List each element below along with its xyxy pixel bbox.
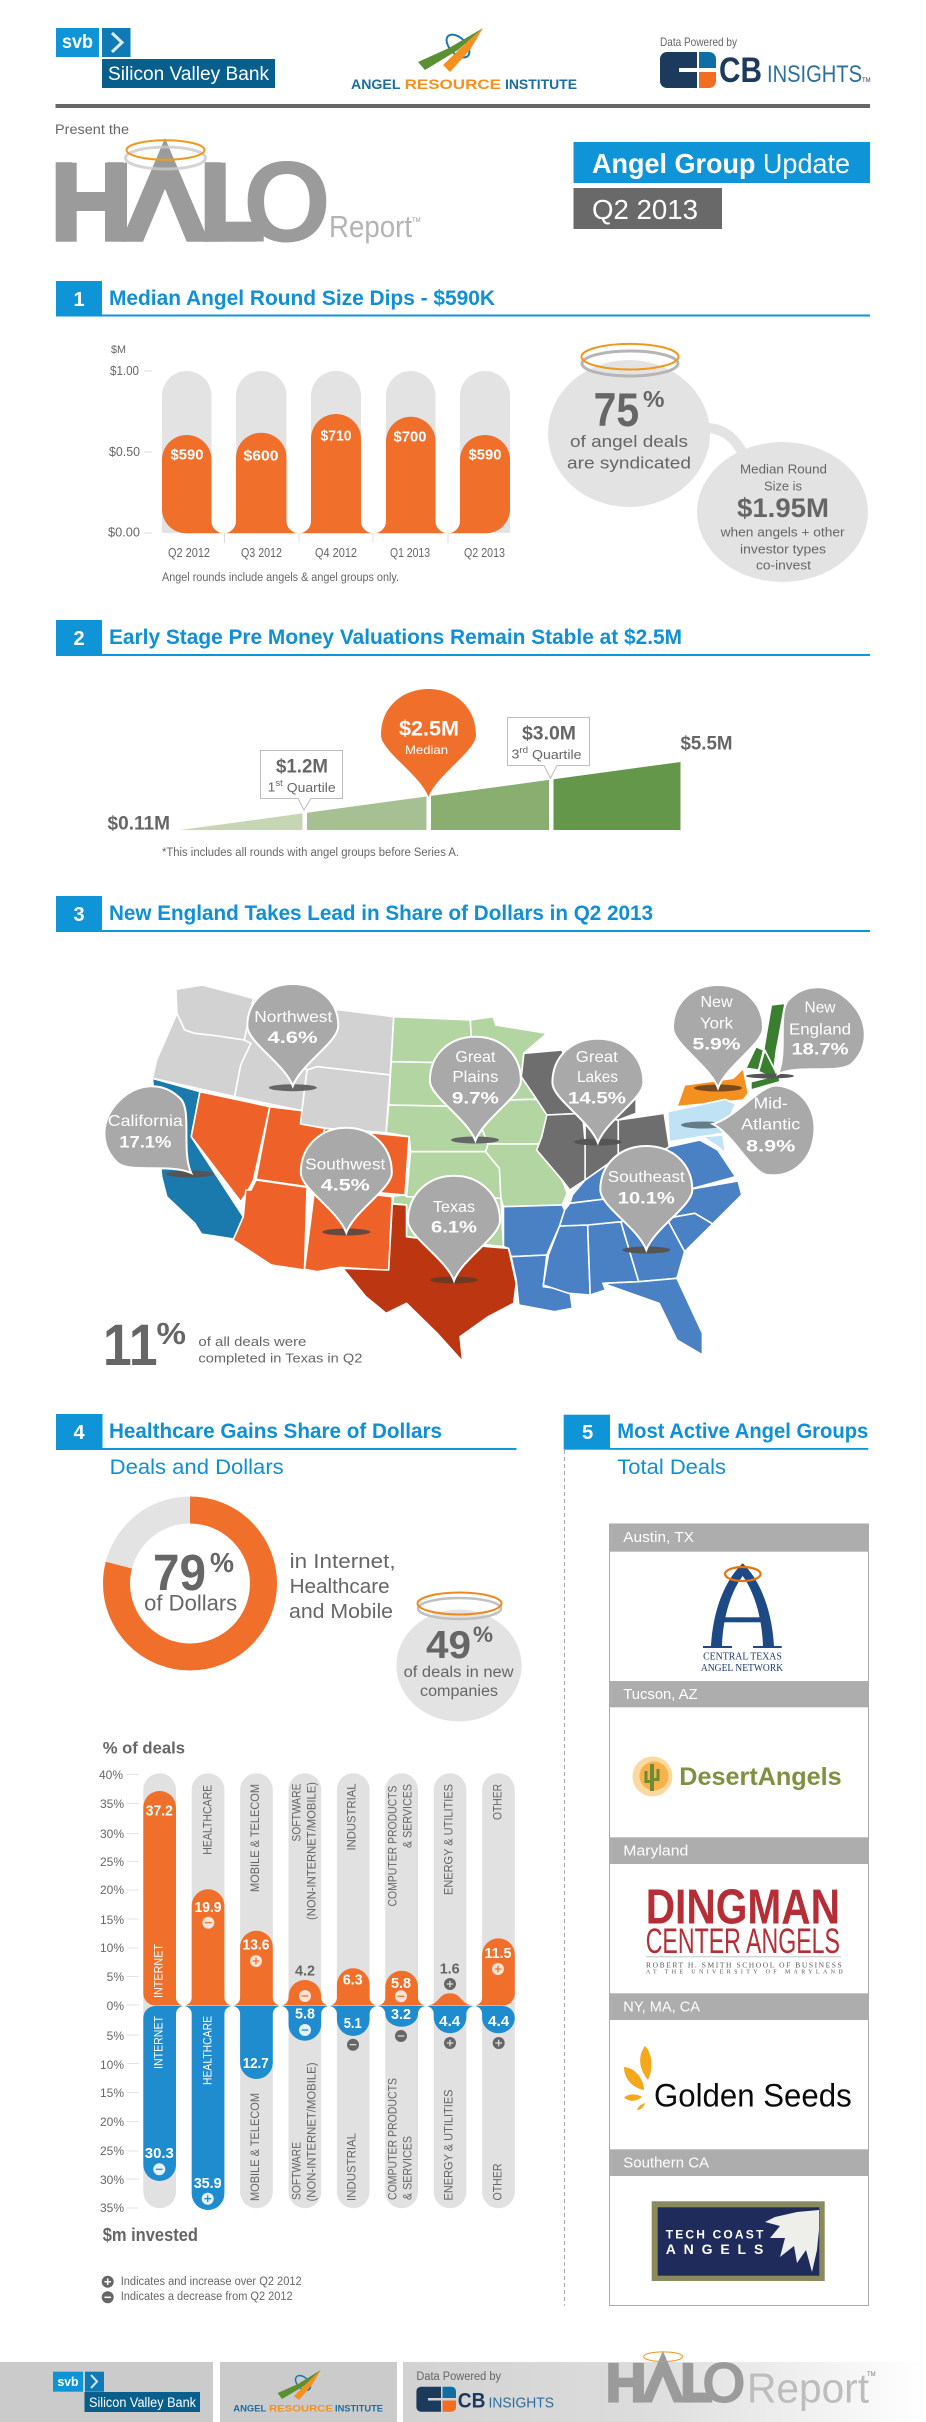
values: percent of deals: 37.2: [146, 1802, 173, 1820]
logo: Tech Coast Angels: [652, 2201, 825, 2281]
stat: 11% of deals in Texas: completed in Texas in Q2: [198, 1350, 362, 1366]
pin: Great Plains: Great: [455, 1049, 496, 1066]
heading: section 5: [564, 1415, 868, 1450]
bar: Q2 2013: $590: [468, 446, 502, 464]
pin: Great Lakes: [552, 1039, 643, 1146]
pin: New England: [746, 970, 882, 1106]
heading: section 4: Healthcare Gains Share of Dollars: [109, 1420, 442, 1443]
callout: 3rd quartile: Quartile: [528, 746, 582, 762]
values: dollars invested: 3.2: [391, 2006, 411, 2023]
y axis: 25%: [100, 1855, 124, 1869]
subheading: deals and dollars: Deals and Dollars: [110, 1456, 284, 1479]
logo: Angel Resource Institute: ANGEL: [351, 76, 401, 92]
sector labels: bottom row: (NON-INTERNET/MOBILE): [307, 2062, 319, 2202]
logo: Tech Coast Angels: ANGELS: [666, 2241, 763, 2257]
legend: decrease: Indicates a decrease from Q2 2012: [121, 2291, 293, 2303]
logo: HALO Report small: O: [702, 2351, 746, 2415]
row header: Maryland: [609, 1837, 869, 1864]
sector labels: bottom row: OTHER: [492, 2164, 504, 2200]
callout: 75% syndicated: are syndicated: [567, 454, 691, 472]
pin: Southwest: 4.5%: [321, 1176, 370, 1194]
callout: 75% syndicated: 75: [594, 383, 639, 436]
callout: median pin: [381, 689, 476, 797]
y axis: 15%: [100, 1913, 124, 1927]
logo: Silicon Valley Bank: svb: [62, 32, 93, 53]
region: New England states: [746, 1003, 785, 1090]
y axis: 10%: [100, 2058, 124, 2072]
logo: HALO Report small: A: [659, 2364, 668, 2378]
y axis: 5%: [107, 2029, 124, 2043]
stat: 11% of deals in Texas: %: [156, 1316, 186, 1351]
bar: Q2 2013: [448, 435, 510, 533]
sector labels: bottom row: & SERVICES: [402, 2136, 414, 2200]
heading: section 4: [56, 1414, 516, 1450]
values: dollars invested: 30.3: [145, 2145, 174, 2162]
logo: HALO Report small: L: [679, 2352, 714, 2416]
region: California: [152, 1078, 243, 1239]
logo: HALO Report: H: [48, 139, 131, 267]
row header: Tucson, AZ: Tucson, AZ: [623, 1686, 698, 1703]
bar: Q3 2012: [224, 433, 299, 533]
title banner: Q2 2013: [574, 188, 722, 229]
sector labels: bottom row: MOBILE & TELECOM: [250, 2093, 262, 2201]
callout: 3rd quartile: $3.0M: [522, 724, 576, 744]
bar: Q3 2012: $600: [244, 448, 278, 464]
values: percent of deals: [146, 1802, 512, 1992]
logo: HALO Report: TM: [412, 218, 421, 224]
logo: HALO Report: Report: [329, 209, 412, 244]
values: percent of deals: 4.2: [295, 1962, 315, 1980]
logo: Golden Seeds: [624, 2046, 852, 2114]
y axis: 20%: [100, 1883, 124, 1897]
bars: dollars invested (blue): [143, 2006, 515, 2210]
callout: 1st quartile: Quartile: [283, 780, 336, 794]
bar: Q4 2012: [299, 414, 373, 533]
heading: section 1: Median Angel Round Size Dips - $590K: [109, 287, 495, 310]
sector labels: bottom row: SOFTWARE: [292, 2142, 304, 2200]
sector labels: bottom row: INTERNET: [153, 2016, 165, 2069]
row header: Southern CA: [609, 2149, 869, 2176]
header logos: [56, 28, 871, 92]
values: percent of deals: 6.3: [343, 1972, 363, 1988]
y axis: 10%: [100, 1941, 124, 1955]
sector labels: bottom row: COMPUTER PRODUCTS: [387, 2078, 399, 2200]
sector labels: top row: SOFTWARE: [292, 1783, 304, 1842]
pin: Southeast: Southeast: [608, 1169, 685, 1186]
logo: Central Texas Angel Network: [701, 1563, 784, 1674]
bar: Q2 2012: [162, 435, 224, 533]
pin: Mid-Atlantic: 8.9%: [746, 1136, 795, 1156]
row header: Tucson, AZ: [609, 1681, 869, 1707]
title banner: Angel Group Update: Angel Group Update: [592, 148, 850, 179]
donut chart: 79% of dollars: %: [210, 1547, 234, 1578]
callout: 3rd quartile: 3: [512, 746, 519, 762]
pin: Great Lakes: Lakes: [577, 1069, 618, 1086]
values: dollars invested: 35.9: [194, 2175, 222, 2192]
callout: 1st quartile: [260, 750, 342, 810]
footnote: Angel rounds include angels & angel groups only.: [162, 572, 399, 584]
logo: Dingman Center Angels: DINGMAN: [646, 1880, 840, 1934]
y axis: 0%: [107, 1999, 124, 2013]
bar tracks: [143, 1773, 515, 2208]
y axis: 15%: [100, 2086, 124, 2100]
pin: Northwest: Northwest: [254, 1009, 333, 1026]
logo: Dingman Center Angels: AT THE UNIVERSITY OF MARYLAND: [646, 1970, 843, 1976]
legend: [102, 2276, 302, 2303]
map states: [152, 985, 785, 1362]
y axis labels: $1.00: [110, 364, 139, 378]
pin: Southwest: [301, 1128, 392, 1236]
pin: Northwest: [247, 984, 338, 1091]
row header: Southern CA: Southern CA: [623, 2154, 709, 2172]
logo: Angel Resource Institute: INSTITUTE: [505, 76, 577, 92]
callout: 1st quartile: st: [275, 778, 283, 788]
bar tracks: [162, 371, 510, 533]
logo: CB Insights: TM: [862, 78, 871, 84]
values: percent of deals: 19.9: [194, 1899, 222, 1916]
region: southwest states: [191, 1092, 409, 1272]
x axis labels: [168, 546, 505, 560]
logo: Dingman Center Angels: [646, 1880, 843, 1976]
sector labels: top row: INDUSTRIAL: [347, 1783, 359, 1850]
sector labels: top row: [153, 1782, 504, 1998]
pin: Great Plains: Plains: [452, 1069, 498, 1086]
pin: California: 17.1%: [119, 1132, 171, 1152]
change markers: dark: [347, 1978, 505, 2051]
sector labels: top row: MOBILE & TELECOM: [250, 1784, 262, 1892]
callout: 3rd quartile: rd: [519, 745, 528, 755]
region: great plains states: [386, 1017, 567, 1247]
pin: New York: York: [700, 1016, 734, 1032]
region: southeast states: [503, 1140, 742, 1355]
bar: Q2 2012: $590: [170, 446, 204, 464]
footer panel: Angel Resource Institute: RESOURCE: [269, 2404, 333, 2414]
pin: Mid-Atlantic: Atlantic: [741, 1116, 800, 1134]
wedge segments: [180, 762, 680, 830]
pin: Great Plains: [430, 1037, 521, 1144]
logo: CB Insights: Data Powered by: [660, 35, 737, 49]
logo: Desert Angels: [632, 1756, 842, 1796]
y axis: 35%: [100, 2201, 124, 2215]
logo: HALO Report: [48, 138, 421, 267]
pin: Southwest: Southwest: [305, 1156, 386, 1174]
dashed divider: [564, 1450, 566, 2306]
bar: Q4 2012: $710: [320, 428, 352, 444]
row header: NY, MA, CA: [609, 1993, 869, 2020]
sector labels: top row: (NON-INTERNET/MOBILE): [307, 1782, 319, 1920]
logo: Golden Seeds: Golden Seeds: [654, 2078, 852, 2114]
footer panel: CB Insights and Halo Report: Report: [747, 2365, 869, 2412]
y axis: 40%: [99, 1768, 123, 1782]
heading: section 1: 1: [73, 289, 85, 311]
pin: New England: New: [804, 1000, 836, 1016]
callout: 1st quartile: 1: [268, 780, 275, 794]
x axis labels: Q2 2013: [464, 546, 505, 560]
callout: 75% syndicated: %: [643, 386, 664, 412]
map: share of dollars by US region: [87, 970, 882, 1378]
y axis: 35%: [100, 1797, 124, 1811]
pin: California: [87, 1069, 223, 1205]
footer panel: Silicon Valley Bank: Silicon Valley Bank: [89, 2395, 196, 2410]
callout: 75% syndicated: of angel deals: [570, 432, 688, 451]
logo: Desert Angels: DesertAngels: [679, 1763, 842, 1791]
region: northwest states: [152, 985, 394, 1133]
heading: section 2: [56, 620, 870, 656]
heading: section 5: 5: [582, 1422, 593, 1444]
pin: Mid-Atlantic: [681, 1079, 819, 1179]
x axis labels: Q2 2012: [168, 546, 210, 560]
logo: Angel Resource Institute: [351, 28, 577, 92]
subheading: total deals: Total Deals: [617, 1456, 726, 1479]
pin: Texas: Texas: [433, 1199, 475, 1216]
y axis: [99, 1768, 139, 2215]
logo: CB Insights: INSIGHTS: [767, 61, 862, 88]
logo: Tech Coast Angels: TECH COAST: [666, 2227, 764, 2241]
sector labels: top row: INTERNET: [153, 1944, 165, 1998]
heading: section 4: 4: [73, 1422, 85, 1444]
bar: Q1 2013: [374, 417, 448, 533]
sector labels: bottom row: [153, 2016, 504, 2202]
text: in internet, healthcare and mobile: in Internet,: [290, 1551, 396, 1573]
logo: HALO Report: L: [197, 139, 267, 267]
pin: Great Lakes: Great: [576, 1049, 618, 1066]
callout: median round size $1.95M: $1.95M: [737, 493, 829, 523]
callout: 49% of deals in new companies: 49: [426, 1624, 471, 1667]
text: in internet, healthcare and mobile: Healthcare: [290, 1576, 390, 1598]
callout: 3rd quartile: [508, 718, 590, 778]
logo: HALO Report: A: [156, 165, 174, 192]
pin: New York: [673, 985, 763, 1092]
y axis labels: $M: [111, 344, 126, 356]
callout: median round size $1.95M: Size is: [764, 478, 802, 494]
heading: section 2: Early Stage Pre Money Valuations Remain Stable at $2.5M: [109, 626, 682, 649]
row header: Maryland: Maryland: [623, 1842, 688, 1860]
stat: 11% of deals in Texas: [103, 1313, 362, 1378]
callout: 49% of deals in new companies: %: [473, 1622, 493, 1647]
row header: NY, MA, CA: NY, MA, CA: [623, 1998, 700, 2016]
sector labels: top row: OTHER: [492, 1784, 504, 1820]
y axis: 5%: [107, 1970, 124, 1984]
bar chart: deals and dollars by sector: [99, 1738, 515, 2245]
y axis labels: [108, 344, 448, 543]
callout: median round size $1.95M: [697, 442, 868, 582]
bar: Q1 2013: $700: [394, 428, 426, 446]
footer panel: CB Insights and Halo Report: [403, 2351, 926, 2422]
pin: New York: New: [700, 994, 733, 1011]
sector labels: top row: & SERVICES: [402, 1784, 414, 1848]
pin: Southeast: 10.1%: [618, 1188, 675, 1208]
title banner: Angel Group Update: [574, 142, 870, 183]
panel: most active angel groups list: [609, 1524, 869, 2306]
donut chart: 79% of dollars: [116, 1510, 264, 1657]
x axis labels: Q3 2012: [241, 546, 282, 560]
y axis: 30%: [100, 2173, 124, 2187]
region: New York: [677, 1068, 748, 1107]
chart: valuation wedge: [108, 689, 732, 859]
heading: section 3: [56, 896, 870, 932]
values: percent of deals: 11.5: [484, 1945, 512, 1962]
callout: median round size $1.95M: investor types: [740, 542, 827, 556]
callout: median pin: $2.5M: [399, 718, 459, 740]
region: mid-atlantic states: [668, 1099, 736, 1153]
sector labels: bottom row: INDUSTRIAL: [346, 2132, 358, 2201]
logo: HALO Report small: [604, 2351, 746, 2416]
text: present the: Present the: [55, 121, 129, 137]
callout: median round size $1.95M: when angels + other: [720, 524, 845, 540]
heading: section 3: New England Takes Lead in Share of Dollars in Q2 2013: [109, 902, 653, 925]
callout connector: [706, 428, 745, 458]
text: in internet, healthcare and mobile: and Mobile: [289, 1601, 393, 1623]
logo: Central Texas Angel Network: ANGEL NETWORK: [701, 1663, 784, 1674]
footer panel: CB Insights and Halo Report: CB: [458, 2389, 486, 2412]
footer band: [0, 2351, 926, 2422]
footer panel: Silicon Valley Bank: [0, 2362, 213, 2422]
pin: Texas: [408, 1176, 500, 1284]
sector labels: top row: COMPUTER PRODUCTS: [387, 1785, 399, 1906]
region: Texas: [343, 1204, 516, 1362]
footer panel: Angel Resource Institute: ANGEL: [233, 2404, 267, 2414]
footer panel: CB Insights and Halo Report: TM: [867, 2372, 876, 2378]
values: dollars invested: 4.4: [439, 2013, 461, 2030]
logo: Central Texas Angel Network: CENTRAL TEXAS: [703, 1652, 782, 1662]
pin: Great Lakes: 14.5%: [568, 1088, 626, 1108]
values: dollars invested: 4.4: [488, 2013, 510, 2030]
bar chart: median angel round size: [108, 344, 510, 584]
y axis: 25%: [100, 2144, 124, 2158]
label: maximum: $5.5M: [680, 734, 732, 754]
logo: HALO Report small: H: [604, 2352, 646, 2416]
donut chart: 79% of dollars: of Dollars: [144, 1590, 237, 1616]
footer panel: Angel Resource Institute: INSTITUTE: [335, 2404, 383, 2414]
callout: 49% of deals in new companies: of deals in new: [404, 1664, 514, 1681]
values: dollars invested: [145, 2006, 510, 2192]
legend: increase: Indicates and increase over Q2 2012: [121, 2276, 302, 2288]
y axis: 30%: [100, 1827, 124, 1841]
pin: Mid-Atlantic: Mid-: [754, 1096, 788, 1112]
heading: section 1: [56, 281, 870, 316]
values: percent of deals: 1.6: [440, 1960, 460, 1978]
y axis labels: $0.50: [109, 445, 140, 459]
logo: Angel Resource Institute: RESOURCE: [405, 76, 501, 92]
callout: median round size $1.95M: Median Round: [740, 462, 827, 476]
callout: 49% of deals in new companies: companies: [420, 1683, 498, 1700]
logo: HALO Report: O: [243, 138, 331, 266]
axis title: % of deals: % of deals: [103, 1738, 185, 1758]
values: dollars invested: 12.7: [243, 2055, 269, 2072]
sector labels: bottom row: ENERGY & UTILITIES: [444, 2089, 456, 2200]
title banner: Q2 2013: Q2 2013: [592, 194, 698, 225]
footer panel: CB Insights and Halo Report: Data Powered by: [416, 2371, 501, 2383]
bars: percent of deals (orange): [143, 1791, 515, 2006]
footer panel: CB Insights and Halo Report: INSIGHTS: [488, 2394, 554, 2411]
heading: section 5: Most Active Angel Groups: [617, 1420, 868, 1443]
header rule: [56, 104, 870, 108]
values: dollars invested: 5.8: [295, 2006, 315, 2022]
callout: median round size $1.95M: co-invest: [756, 558, 811, 572]
logo: CB Insights: [660, 35, 871, 90]
row header: Austin, TX: Austin, TX: [623, 1529, 694, 1546]
heading: section 2: 2: [73, 628, 85, 650]
logo: Silicon Valley Bank: Silicon Valley Bank: [108, 64, 269, 85]
heading: section 3: 3: [73, 904, 85, 926]
x axis labels: Q1 2013: [390, 546, 430, 560]
pin: Northwest: 4.6%: [268, 1028, 318, 1047]
callout: median pin: Median: [405, 743, 448, 757]
pin: Southeast: [600, 1146, 692, 1254]
row header: Austin, TX: [609, 1524, 869, 1552]
stat: 11% of deals in Texas: of all deals were: [198, 1334, 306, 1349]
pin: Texas: 6.1%: [431, 1218, 477, 1236]
label: minimum: $0.11M: [108, 814, 170, 834]
pin: Great Plains: 9.7%: [452, 1088, 499, 1108]
footnote: *This includes all rounds with angel groups before Series A.: [162, 847, 459, 859]
values: dollars invested: 5.1: [344, 2015, 362, 2032]
sector labels: bottom row: HEALTHCARE: [202, 2016, 214, 2085]
sector labels: top row: HEALTHCARE: [202, 1784, 214, 1855]
y axis labels: $0.00: [108, 526, 140, 540]
logo: Silicon Valley Bank: [56, 28, 275, 88]
text: in internet, healthcare and mobile: [289, 1551, 396, 1623]
values: percent of deals: 5.8: [391, 1975, 411, 1992]
pin: New England: 18.7%: [792, 1040, 848, 1058]
pin: New York: 5.9%: [692, 1034, 740, 1054]
values: percent of deals: 13.6: [242, 1936, 270, 1954]
sector labels: top row: ENERGY & UTILITIES: [444, 1784, 456, 1895]
callout: 1st quartile: $1.2M: [276, 756, 328, 778]
y axis: 20%: [100, 2115, 124, 2129]
change markers: light: [153, 1917, 504, 2205]
footer panel: Silicon Valley Bank: svb: [58, 2374, 79, 2389]
pin: California: California: [108, 1113, 183, 1130]
callout: 75% syndicated: [548, 344, 710, 507]
stat: 11% of deals in Texas: 11: [103, 1313, 158, 1378]
logo: Dingman Center Angels: ROBERT H. SMITH SCHOOL OF BUSINESS: [646, 1960, 842, 1970]
axis title: $m invested: $m invested: [103, 2225, 198, 2245]
donut chart: 79% of dollars: 79: [153, 1544, 206, 1601]
callout: 49% of deals in new companies: [396, 1592, 522, 1722]
region: great lakes states: [521, 1050, 669, 1190]
footer panel: Angel Resource Institute: [220, 2362, 397, 2422]
x axis labels: Q4 2012: [315, 546, 357, 560]
logo: CB Insights: CB: [719, 51, 762, 90]
pin: New England: England: [789, 1022, 851, 1038]
